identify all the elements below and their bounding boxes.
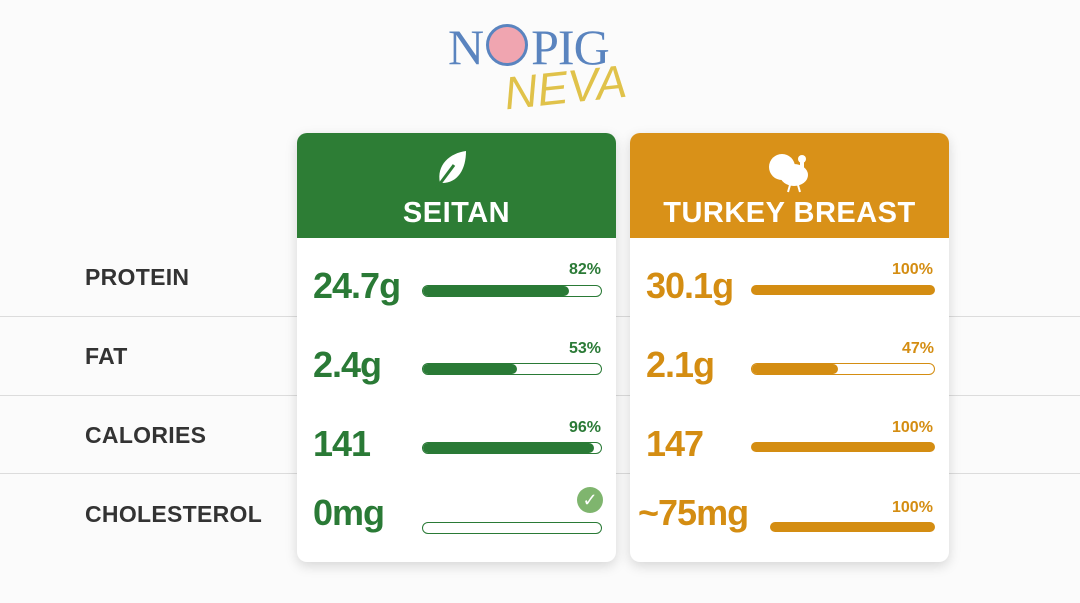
header: seitan: SEITAN bbox=[403, 197, 510, 229]
row labels: CHOLESTEROL bbox=[85, 501, 262, 527]
panel: turkey: 100% bbox=[892, 499, 933, 516]
panel: turkey: 30.1g bbox=[646, 265, 733, 306]
panel: seitan: 141 bbox=[313, 423, 370, 464]
panel: seitan bbox=[297, 133, 616, 562]
panel: turkey: 100% bbox=[892, 261, 933, 278]
icon: check: ✓ bbox=[582, 490, 598, 510]
panel: turkey: 147 bbox=[646, 423, 703, 464]
panel: turkey: 2.1g bbox=[646, 344, 714, 385]
row labels: CALORIES bbox=[85, 422, 206, 448]
header: turkey bbox=[630, 133, 949, 238]
panel: seitan: 96% bbox=[569, 419, 601, 436]
icon: check bbox=[577, 487, 603, 513]
panel: seitan: 2.4g bbox=[313, 344, 381, 385]
row labels bbox=[85, 264, 262, 527]
row labels: FAT bbox=[85, 343, 128, 369]
panel: turkey: 100% bbox=[892, 419, 933, 436]
logo bbox=[448, 19, 629, 119]
panel: seitan: 24.7g bbox=[313, 265, 400, 306]
icon: turkey bbox=[769, 154, 808, 192]
panel: seitan: 82% bbox=[569, 261, 601, 278]
header: turkey: TURKEY BREAST bbox=[663, 197, 916, 229]
panel: turkey: 47% bbox=[902, 340, 934, 357]
panel: turkey: ~75mg bbox=[638, 492, 748, 533]
row labels: PROTEIN bbox=[85, 264, 189, 290]
logo: N PIG bbox=[448, 19, 609, 75]
panel: turkey bbox=[630, 133, 949, 562]
panel: seitan: 53% bbox=[569, 340, 601, 357]
panel: seitan: 0mg bbox=[313, 492, 384, 533]
header: seitan bbox=[297, 133, 616, 238]
icon: leaf bbox=[439, 151, 466, 183]
logo: NEVA bbox=[502, 55, 629, 119]
